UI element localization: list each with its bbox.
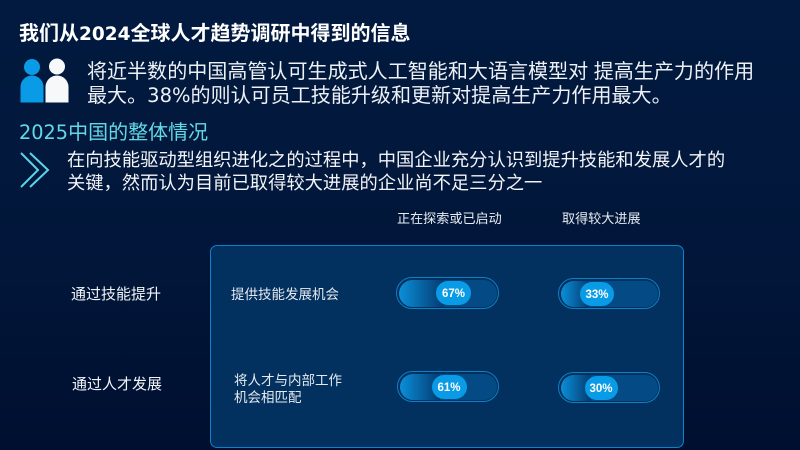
item label: internal job matching: 机会相匹配 [234,390,302,405]
progress pill: 67% [396,277,499,309]
item label: internal job matching [234,373,342,405]
section heading: 2025中国的整体情况 [19,121,208,144]
progress pill: 33%: 33% [585,288,609,300]
section description: 在向技能驱动型组织进化之的过程中，中国企业充分认识到提升技能和发展人才的 [67,149,725,170]
icon: two people [20,58,68,102]
progress pill: 61% [397,371,499,402]
progress pill: 30% [558,372,660,403]
section description: 关键，然而认为目前已取得较大进展的企业尚不足三分之一 [67,172,542,193]
section description [67,149,725,193]
key finding text: 最大。38%的则认可员工技能升级和更新对提高生产力作用最大。 [87,84,672,107]
key finding text [87,61,754,107]
item label: internal job matching: 将人才与内部工作 [234,373,342,388]
row label: skills: 通过技能提升 [71,286,161,303]
progress pill: 67%: 67% [442,288,465,300]
row label: talent: 通过人才发展 [72,376,162,393]
icon: double chevron [20,152,50,188]
panel: data table [210,245,684,448]
column header: major progress: 取得较大进展 [562,211,641,226]
title: 我们从2024全球人才趋势调研中得到的信息 [19,23,410,45]
progress pill: 33% [558,278,660,309]
column header: exploring or started: 正在探索或已启动 [397,211,502,226]
progress pill: 61%: 61% [437,382,461,394]
item label: skill development opportunities: 提供技能发展机会 [231,287,339,302]
progress pill: 30%: 30% [589,382,613,394]
key finding text: 将近半数的中国高管认可生成式人工智能和大语言模型对 提高生产力的作用 [87,61,754,83]
